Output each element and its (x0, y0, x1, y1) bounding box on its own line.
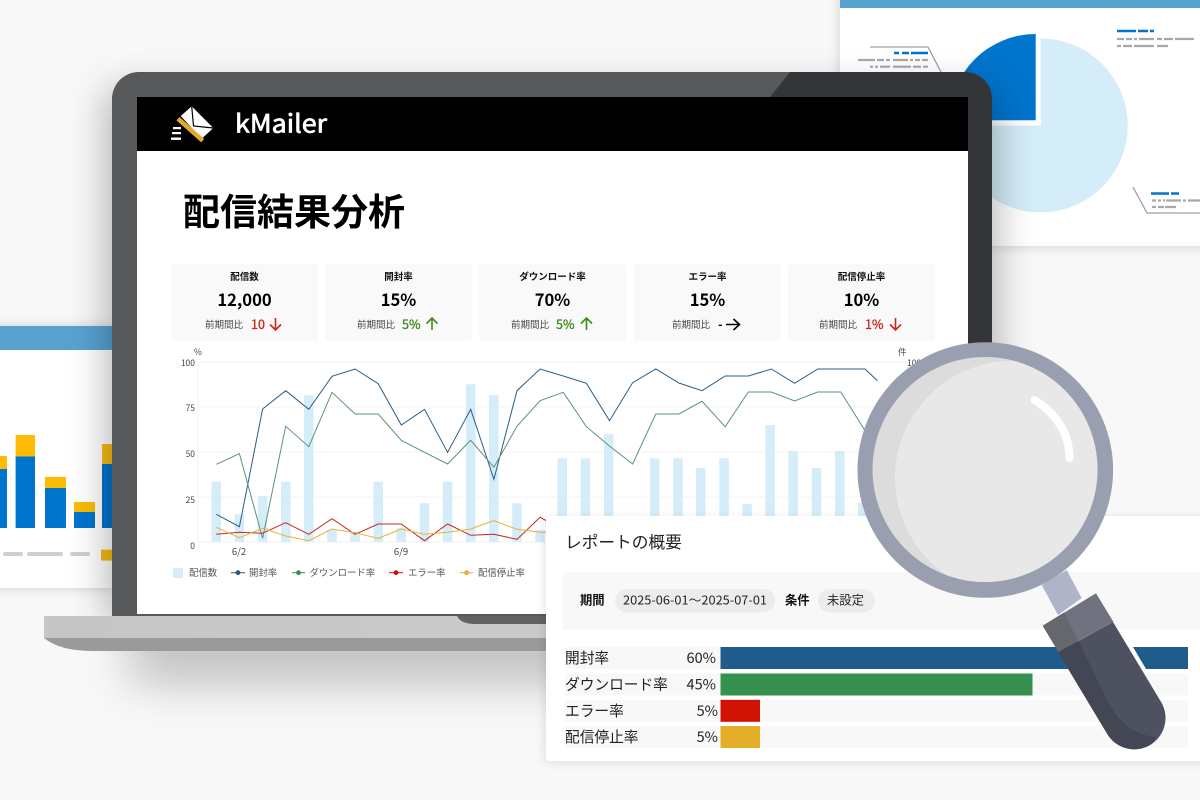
chart legend: 開封率 (249, 565, 277, 579)
panel: KPI 配信停止率: 10% (844, 287, 879, 311)
icon: kMailer logo (171, 106, 213, 141)
bars: 配信数 (212, 384, 868, 542)
rate row: 配信停止率: 5% (697, 726, 718, 747)
laptop shadow (108, 90, 1030, 680)
legend placeholders (3, 550, 112, 561)
rate row: 配信停止率 (565, 726, 1188, 748)
icon: down arrow (270, 318, 281, 330)
panel: KPI 開封率 (325, 264, 472, 341)
brand name: kMailer (235, 104, 327, 140)
panel: back card with pie chart (840, 0, 1200, 246)
stacked bars (0, 435, 112, 528)
axis labels: 25 (186, 494, 195, 506)
panel: back card with stacked bar chart (0, 326, 112, 588)
rate row: ダウンロード率 (565, 674, 1188, 696)
axis labels: % (194, 346, 202, 358)
panel: KPI 配信数 (171, 264, 318, 341)
rate row: エラー率: 5% (697, 700, 718, 721)
callout: upper right (1117, 31, 1194, 46)
panel: KPI ダウンロード率: 70% (535, 287, 570, 311)
panel: KPI 配信停止率 (788, 264, 935, 341)
panel: KPI ダウンロード率: ダウンロード率 (519, 269, 586, 283)
axis labels: 100 (907, 357, 921, 369)
axis labels: 50 (186, 448, 195, 460)
panel: KPI ダウンロード率: 5% (556, 314, 575, 333)
panel: KPI ダウンロード率 (479, 264, 626, 341)
panel: KPI 配信停止率: 前期間比 (819, 317, 858, 331)
icon: up arrow (426, 318, 438, 330)
panel: KPI 開封率: 15% (381, 287, 416, 311)
line: エラー率 (216, 517, 563, 541)
callout: upper left (858, 47, 942, 74)
axis labels: 75 (186, 402, 195, 414)
title: 配信結果分析 (183, 182, 405, 236)
laptop base (44, 616, 1144, 651)
panel: KPI 開封率: 前期間比 (357, 317, 396, 331)
icon: down arrow (890, 318, 901, 330)
neck (1042, 570, 1082, 615)
filter conditions: 条件 (785, 590, 810, 608)
panel: KPI エラー率: エラー率 (688, 269, 727, 283)
panel: KPI 開封率: 5% (402, 314, 421, 333)
panel: KPI 配信数: 前期間比 (205, 317, 244, 331)
filter conditions (563, 572, 1200, 630)
rate row: 開封率 (565, 647, 1188, 669)
filter conditions: 期間 (580, 590, 605, 608)
rate row: エラー率 (565, 700, 1188, 722)
panel: KPI 配信数: 12,000 (217, 287, 272, 311)
axis labels: 100 (181, 357, 195, 369)
collar (1043, 593, 1113, 652)
chart legend: ダウンロード率 (310, 565, 375, 579)
line: 配信停止率 (216, 521, 563, 541)
panel: KPI 配信停止率: 1% (865, 314, 884, 333)
filter conditions: 未設定 (827, 590, 864, 608)
laptop bezel (112, 72, 992, 616)
rate row: 開封率: 60% (687, 647, 716, 668)
handle (1058, 622, 1166, 750)
chart legend: エラー率 (408, 565, 446, 579)
chart: delivery results (173, 346, 921, 579)
panel: KPI 配信停止率: 配信停止率 (838, 269, 886, 283)
rate row: 開封率: 開封率 (565, 647, 609, 668)
rate row: ダウンロード率: 45% (687, 674, 716, 694)
panel: KPI 配信数: 10 (251, 314, 265, 333)
panel: KPI エラー率 (634, 264, 781, 341)
chart legend (173, 565, 525, 579)
report title: レポートの概要 (565, 529, 682, 553)
axis labels (181, 346, 921, 558)
ring (858, 342, 1113, 598)
rate row: エラー率: エラー率 (565, 700, 624, 721)
line: ダウンロード率 (216, 392, 880, 538)
icon: right arrow (726, 319, 740, 330)
axis labels: 6/2 (232, 544, 246, 558)
callout: lower right (1133, 187, 1200, 213)
panel: KPI エラー率: 15% (690, 287, 725, 311)
axis labels: 件 (898, 346, 907, 358)
laptop (44, 72, 1144, 651)
pie chart (949, 34, 1128, 212)
panel: KPI 開封率: 開封率 (384, 269, 413, 283)
axis labels: 6/9 (394, 544, 408, 558)
panel: KPI エラー率: - (718, 314, 723, 333)
rate row: ダウンロード率: ダウンロード率 (565, 674, 668, 694)
panel: report summary (546, 516, 1200, 761)
chart legend: 配信停止率 (478, 565, 525, 579)
chart legend: 配信数 (189, 565, 218, 579)
axis labels: 0 (190, 540, 195, 552)
icon: up arrow (581, 318, 592, 330)
line: 開封率 (216, 369, 878, 527)
panel: KPI エラー率: 前期間比 (672, 317, 711, 331)
rate row: 配信停止率: 配信停止率 (565, 726, 638, 747)
handle glint (1128, 647, 1146, 669)
filter conditions: 2025-06-01～2025-07-01 (623, 592, 767, 608)
screen (137, 97, 968, 614)
icon: magnifying glass (858, 342, 1166, 770)
panel: KPI ダウンロード率: 前期間比 (511, 317, 550, 331)
panel: KPI 配信数: 配信数 (230, 269, 259, 283)
lens (872, 357, 1098, 582)
app header (137, 97, 968, 151)
